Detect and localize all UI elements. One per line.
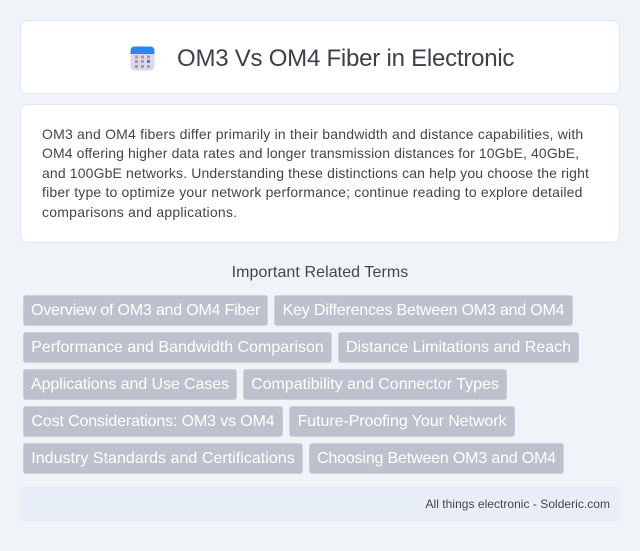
tag: Applications and Use Cases [31,376,229,393]
tag: Performance and Bandwidth Comparison [31,339,324,356]
tag [23,406,283,437]
heading: related terms: Important Related Terms [232,264,408,281]
title: OM3 Vs OM4 Fiber in Electronic [177,45,514,72]
text block: intro: fiber type to optimize your network performance; continue reading to explore detailed [42,184,583,200]
tag [243,369,507,400]
icon: calendar [130,46,154,70]
panel: header [20,20,620,94]
tag: Key Differences Between OM3 and OM4 [283,302,564,319]
footer text: All things electronic - Solderic.com [426,497,610,511]
text block: intro [42,126,589,220]
text block: intro: comparisons and applications. [42,204,237,220]
footer [20,487,620,521]
tag: Industry Standards and Certifications [31,450,295,467]
tag [23,443,303,474]
tag: Compatibility and Connector Types [251,376,499,393]
tag: Future-Proofing Your Network [298,413,506,430]
tag [289,406,515,437]
text block: intro: OM4 offering higher data rates and longer transmission distances for 10GbE, 40GbE, [42,145,579,161]
tag: Distance Limitations and Reach [346,339,571,356]
tag [23,332,332,363]
tag: Choosing Between OM3 and OM4 [317,450,556,467]
tag [23,295,268,326]
text block: intro: and 100GbE networks. Understanding these distinctions can help you choose the right [42,165,589,181]
tag [274,295,573,326]
tag: Overview of OM3 and OM4 Fiber [31,302,260,319]
text block: intro: OM3 and OM4 fibers differ primarily in their bandwidth and distance capabilities, with [42,126,583,142]
tag: Cost Considerations: OM3 vs OM4 [31,413,275,430]
tag [338,332,579,363]
panel: intro text [20,104,620,243]
tag [23,369,237,400]
panel: related term tags [23,295,579,474]
tag [309,443,564,474]
